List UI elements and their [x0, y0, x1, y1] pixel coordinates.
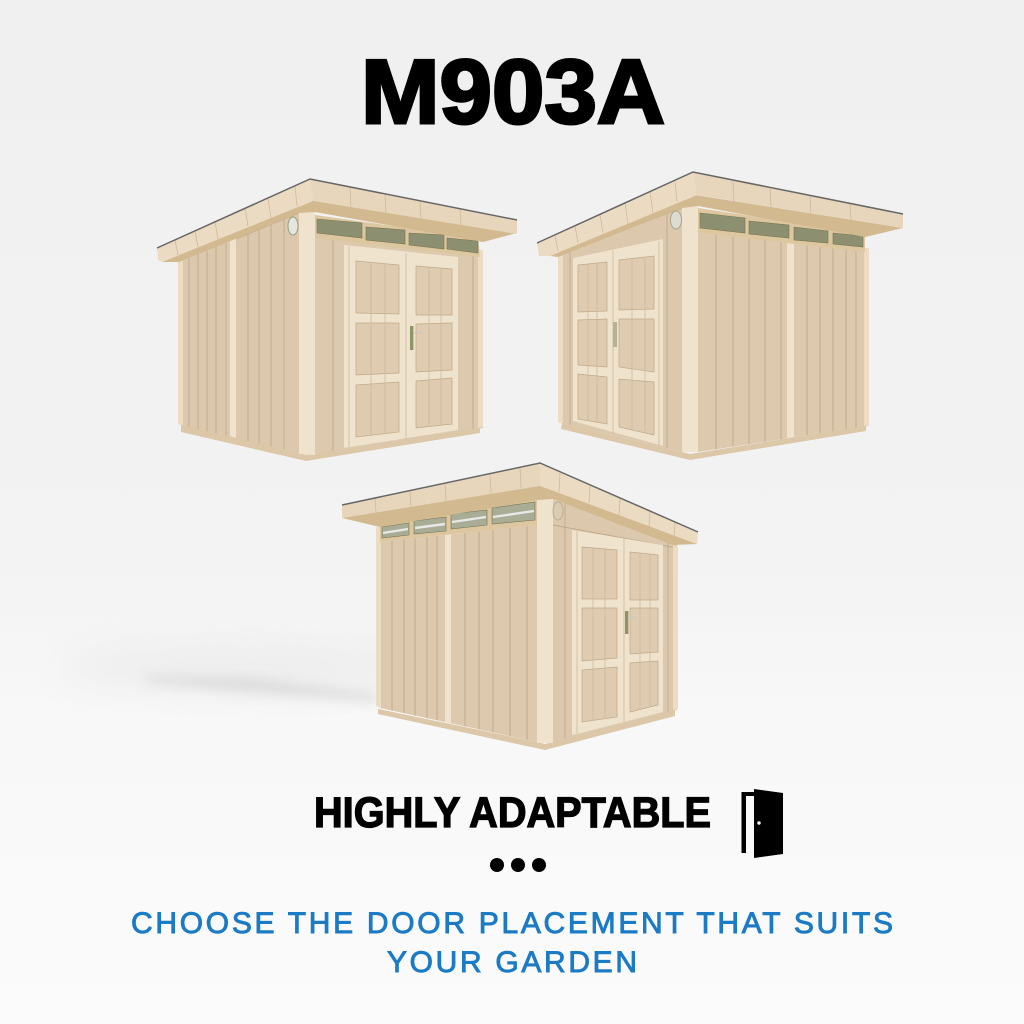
heading: highly adaptable: HIGHLY ADAPTABLE	[314, 789, 711, 837]
plinth	[181, 425, 480, 461]
plinth	[378, 709, 675, 750]
roof	[537, 172, 903, 257]
double door	[572, 530, 663, 735]
vent	[553, 502, 563, 520]
front wall	[376, 525, 537, 742]
clerestory windows	[380, 500, 537, 542]
right wall	[698, 233, 869, 452]
clerestory windows	[315, 215, 480, 257]
left wall	[558, 201, 682, 452]
caption: YOUR GARDEN	[387, 946, 637, 979]
vent	[670, 211, 682, 229]
roof	[157, 179, 517, 262]
shed: door on left wall, upper right	[537, 172, 903, 480]
double door	[573, 239, 663, 446]
title: M903A	[361, 42, 665, 143]
plinth	[561, 423, 866, 460]
caption	[131, 907, 893, 979]
icon: open door	[742, 789, 783, 858]
double door	[344, 245, 458, 448]
roof	[342, 463, 698, 545]
corner post	[682, 202, 698, 452]
three dots	[490, 858, 546, 872]
shed: door on right side wall, lower centre	[342, 463, 698, 760]
left wall	[178, 206, 299, 453]
corner post	[299, 206, 315, 455]
clerestory windows	[698, 208, 865, 252]
right wall	[315, 238, 483, 454]
corner post	[537, 495, 553, 743]
shed: door on right wall, upper left	[157, 179, 517, 480]
side wall	[553, 490, 678, 760]
vent	[288, 217, 298, 235]
caption: CHOOSE THE DOOR PLACEMENT THAT SUITS	[131, 907, 893, 940]
